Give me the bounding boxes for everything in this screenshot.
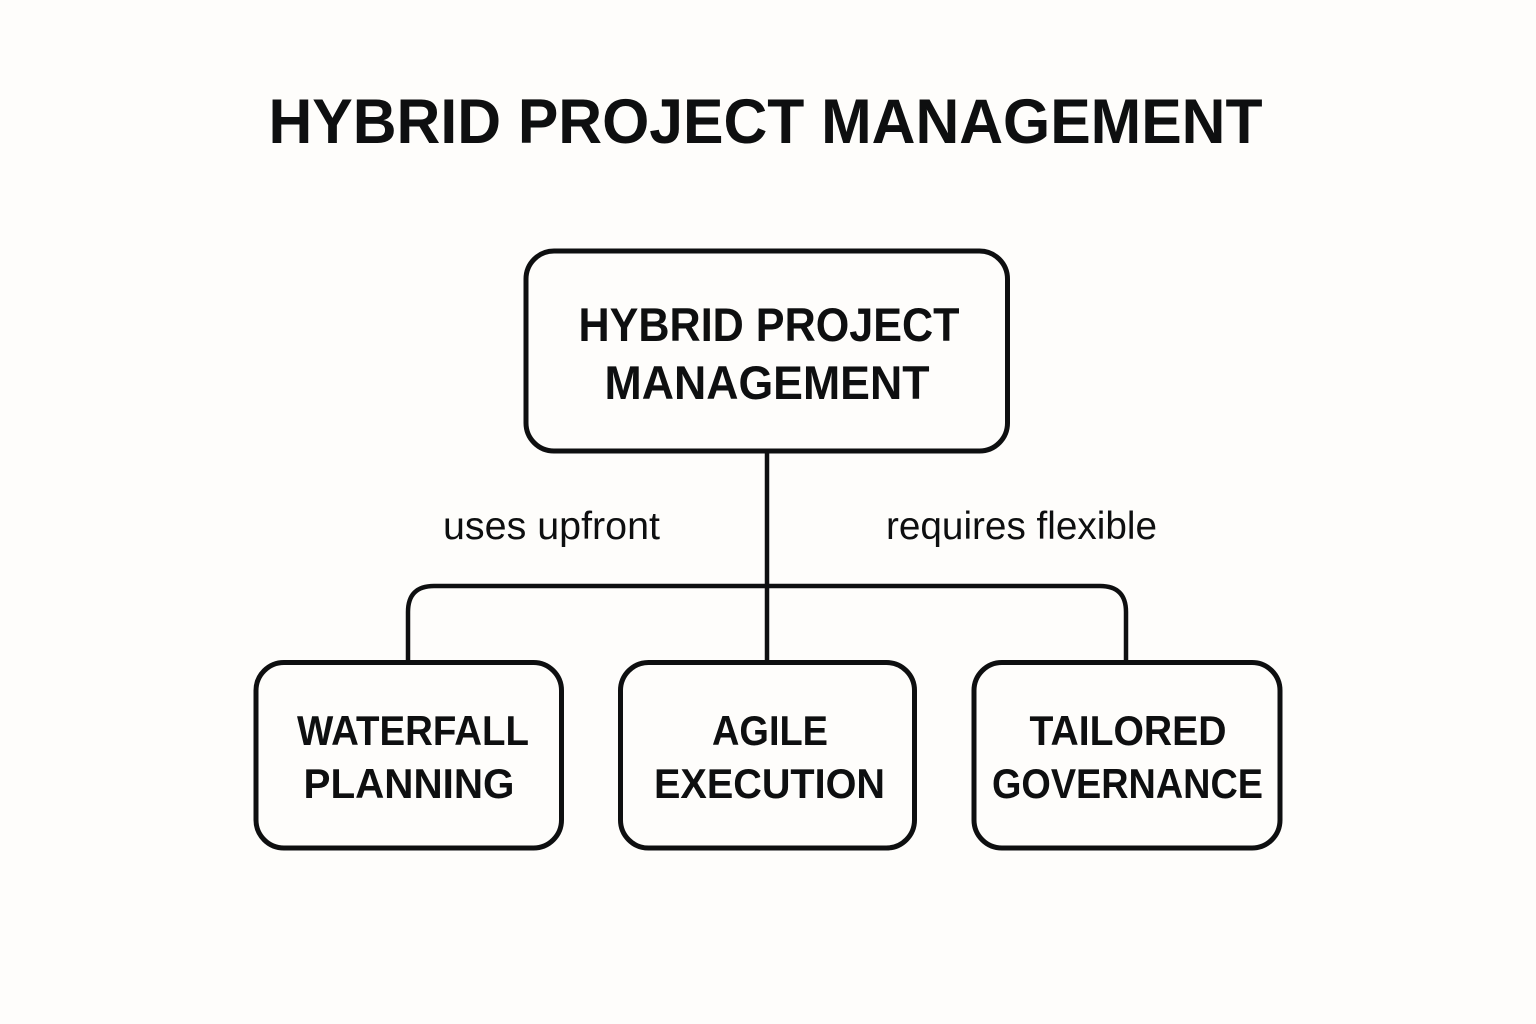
label: requires flexible: requires flexible bbox=[886, 505, 1157, 548]
panel: tailored governance bbox=[974, 662, 1280, 848]
panel: top box bbox=[526, 251, 1008, 451]
panel: tailored governance: TAILORED bbox=[1030, 707, 1226, 754]
title: HYBRID PROJECT MANAGEMENT bbox=[268, 87, 1262, 157]
connector lines bbox=[408, 452, 1126, 661]
panel: tailored governance: GOVERNANCE bbox=[992, 760, 1263, 807]
panel: agile execution bbox=[620, 662, 914, 848]
label: uses upfront: uses upfront bbox=[443, 505, 660, 548]
panel: top box: MANAGEMENT bbox=[604, 357, 930, 410]
panel: agile execution: AGILE bbox=[712, 707, 828, 754]
panel: top box: HYBRID PROJECT bbox=[578, 299, 960, 352]
panel: waterfall planning bbox=[256, 662, 562, 848]
panel: agile execution: EXECUTION bbox=[654, 760, 885, 807]
panel: waterfall planning: PLANNING bbox=[304, 760, 514, 807]
panel: waterfall planning: WATERFALL bbox=[297, 707, 529, 754]
